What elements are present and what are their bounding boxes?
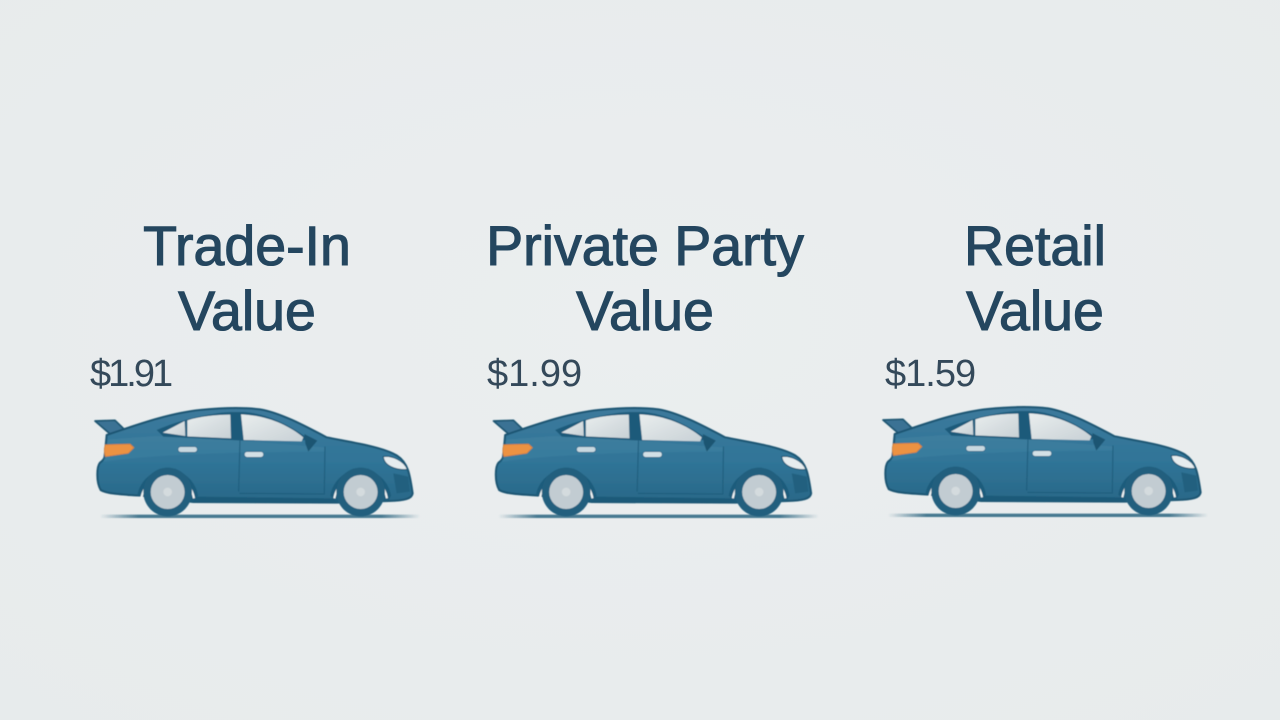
heading: trade-in value: Trade-In bbox=[143, 215, 351, 277]
heading: retail value: Value bbox=[966, 280, 1104, 342]
heading: private party value: Value bbox=[576, 280, 714, 342]
icon: blue sedan bbox=[493, 408, 818, 518]
price: retail: $1.59 bbox=[885, 353, 975, 395]
heading: retail value: Retail bbox=[964, 215, 1106, 277]
heading: trade-in value: Value bbox=[178, 280, 316, 342]
price: private party: $1.99 bbox=[487, 353, 582, 395]
price: trade-in: $1.91 bbox=[90, 353, 172, 395]
column: trade-in value bbox=[90, 215, 420, 518]
column: private party value bbox=[486, 215, 818, 518]
heading: private party value: Private Party bbox=[486, 215, 804, 277]
icon: blue sedan bbox=[95, 408, 420, 518]
column: retail value bbox=[883, 215, 1208, 517]
icon: blue sedan bbox=[883, 407, 1208, 517]
